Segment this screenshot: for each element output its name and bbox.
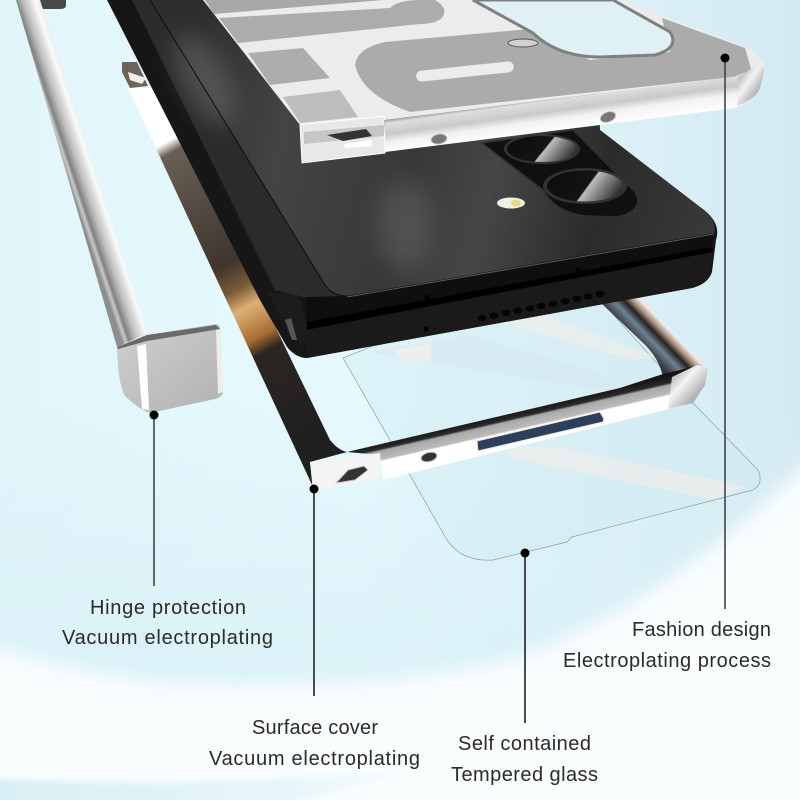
mic holes (424, 268, 580, 332)
surface cover frame (122, 62, 708, 492)
label: surface cover: Vacuum electroplating (209, 748, 420, 770)
lower lens (543, 168, 627, 204)
phone body (107, 0, 717, 358)
grey C band (355, 18, 752, 112)
flash (497, 198, 525, 208)
left side strip (128, 88, 347, 487)
upper lens (504, 134, 580, 164)
camera module (482, 130, 638, 217)
top cover frame (203, 0, 765, 163)
leader: tempered glass (520, 548, 530, 723)
leader: hinge protection (150, 410, 158, 586)
label: fashion design (563, 619, 771, 672)
label: hinge protection (62, 597, 273, 649)
label: self contained (451, 733, 598, 786)
grey U shape (219, 0, 444, 43)
label: self contained: Tempered glass (451, 764, 598, 786)
sim block (300, 116, 385, 163)
hinge seam (150, 0, 347, 296)
cover inner panel (203, 0, 765, 125)
tempered glass panel (343, 300, 760, 560)
slot (477, 412, 604, 451)
label: fashion design: Electroplating process (563, 650, 771, 672)
folded phone (107, 0, 717, 358)
grey block two (283, 90, 358, 123)
grey block one (248, 48, 330, 85)
front rail (347, 366, 700, 480)
camera cut-out (473, 0, 673, 57)
charging port (336, 466, 368, 483)
bracket end (122, 62, 148, 88)
hinge band (132, 0, 347, 298)
label: surface cover: Surface cover (252, 717, 378, 739)
leader: fashion design (720, 54, 730, 609)
soft matte highlights (162, 26, 433, 270)
speaker holes (478, 291, 604, 321)
label: fashion design: Fashion design (632, 619, 771, 641)
screw holes (430, 110, 617, 145)
label: hinge protection: Hinge protection (90, 597, 246, 619)
label: self contained: Self contained (458, 733, 591, 755)
phone back face (150, 0, 715, 296)
right corner (668, 365, 708, 409)
label: hinge protection: Vacuum electroplating (62, 627, 273, 649)
rail tip (737, 66, 764, 106)
phone side edges (306, 233, 714, 322)
hinge protection rod (16, 0, 223, 413)
grey stripe one (205, 0, 383, 14)
front rail (385, 67, 764, 152)
hinge end (268, 292, 307, 347)
white slot (416, 61, 514, 82)
small oval (508, 39, 538, 47)
front block (310, 453, 380, 492)
leader: surface cover (310, 484, 318, 696)
button hole (420, 451, 438, 463)
rear arm (600, 293, 707, 378)
label: surface cover (209, 717, 420, 770)
